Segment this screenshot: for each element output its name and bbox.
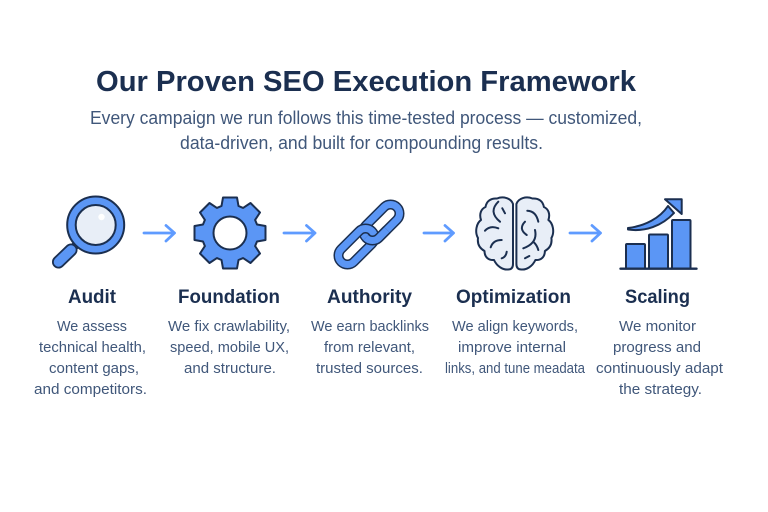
step: audit bbox=[34, 287, 147, 398]
description: audit bbox=[34, 319, 147, 398]
icon: chain links bbox=[335, 201, 403, 268]
description: authority bbox=[311, 319, 429, 377]
description: foundation bbox=[168, 319, 290, 377]
heading: foundation: Foundation bbox=[178, 287, 280, 308]
description: optimization: links, and tune meadata bbox=[445, 361, 586, 377]
step: foundation bbox=[168, 287, 290, 377]
icon: gear bbox=[194, 198, 266, 268]
description: optimization: improve internal bbox=[458, 340, 566, 356]
icon: brain bbox=[476, 197, 553, 270]
title: Our Proven SEO Execution Framework bbox=[96, 66, 637, 98]
subtitle bbox=[90, 108, 642, 153]
arrow: authority to optimization bbox=[424, 226, 454, 241]
description: authority: from relevant, bbox=[324, 340, 415, 356]
step: scaling bbox=[596, 287, 723, 398]
step: optimization bbox=[445, 287, 586, 377]
description: optimization: We align keywords, bbox=[452, 319, 578, 335]
subtitle: data-driven, and built for compounding results. bbox=[180, 133, 543, 153]
heading: optimization: Optimization bbox=[456, 287, 571, 308]
heading: scaling: Scaling bbox=[625, 287, 690, 308]
arrow: audit to foundation bbox=[144, 226, 174, 241]
step: authority bbox=[311, 287, 429, 377]
description: audit: We assess bbox=[57, 319, 127, 335]
description: scaling: progress and bbox=[613, 340, 701, 356]
description: authority: trusted sources. bbox=[316, 361, 423, 377]
description: audit: technical health, bbox=[39, 340, 146, 356]
description: scaling bbox=[596, 319, 723, 398]
arrow: optimization to scaling bbox=[570, 226, 600, 241]
description: authority: We earn backlinks bbox=[311, 319, 429, 335]
arrow: foundation to authority bbox=[284, 226, 315, 241]
description: foundation: We fix crawlability, bbox=[168, 319, 290, 335]
heading: authority: Authority bbox=[327, 287, 412, 308]
description: audit: content gaps, bbox=[49, 361, 139, 377]
icon: magnifying glass bbox=[58, 196, 124, 262]
description: optimization bbox=[445, 319, 586, 377]
description: scaling: We monitor bbox=[619, 319, 696, 335]
description: audit: and competitors. bbox=[34, 382, 147, 398]
description: foundation: speed, mobile UX, bbox=[170, 340, 289, 356]
heading: audit: Audit bbox=[68, 287, 117, 308]
description: scaling: continuously adapt bbox=[596, 361, 723, 377]
subtitle: Every campaign we run follows this time-tested process — customized, bbox=[90, 108, 642, 128]
description: scaling: the strategy. bbox=[619, 382, 702, 398]
icon: growth bar chart bbox=[620, 199, 696, 269]
description: foundation: and structure. bbox=[184, 361, 276, 377]
